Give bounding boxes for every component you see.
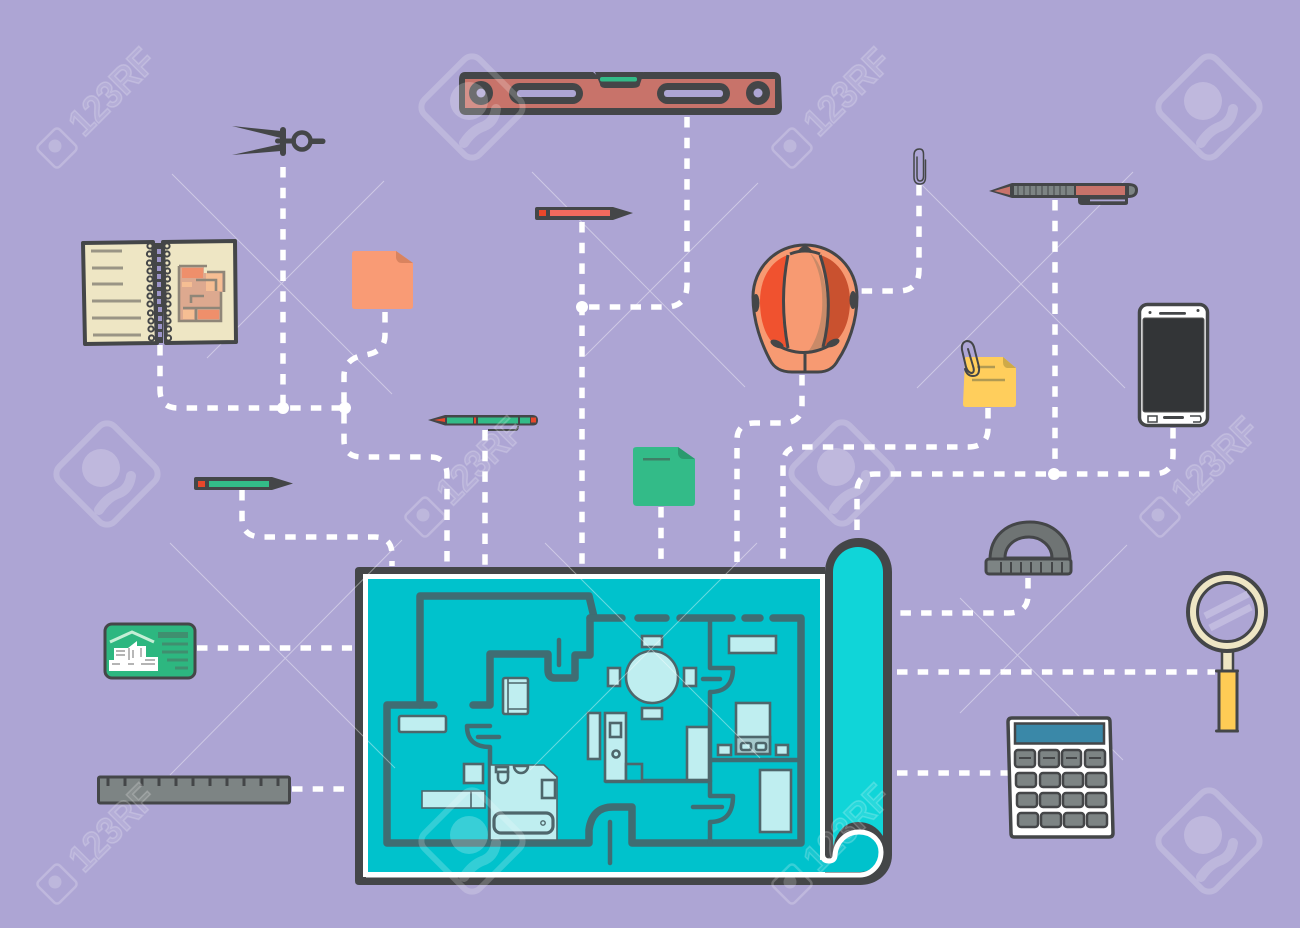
icon: smartphone [1140,304,1208,426]
icon: orange sticky note [352,251,413,309]
icon: paper clip [914,149,926,184]
icon: spirit level [459,72,782,115]
notebook mini floor plan [179,266,224,322]
connector junction dots [277,301,1060,480]
small watermark logos [36,127,1181,905]
icon: house card [105,624,195,678]
icon: ruler [98,777,290,803]
icon: green sticky note [633,447,695,506]
icon: protractor [986,522,1071,574]
dashed connectors [160,117,1215,789]
icon: dividers compass [232,126,326,156]
icon: open spiral notebook with plan [83,241,236,344]
icon: magnifying glass [1188,573,1266,732]
icon: ballpoint pen [989,183,1138,205]
icon: yellow sticky note with clip [962,341,1016,407]
icon: green mechanical pencil [428,415,538,430]
icon: green pencil [194,477,293,490]
blueprint sheet with floor plan [355,538,892,885]
watermarks: 123RF [61,40,165,144]
icon: hard hat [752,245,857,372]
floor plan walls [387,596,801,863]
icon: calculator [1008,718,1113,837]
icon: red pencil [535,207,633,220]
watermarks: 123RF [796,40,900,144]
watermarks: 123RF [1164,409,1268,513]
floor plan furniture [399,636,791,840]
watermarks: 123RF [61,776,165,880]
watermarks: 123RF [429,409,533,513]
watermarks: 123RF [796,776,900,880]
